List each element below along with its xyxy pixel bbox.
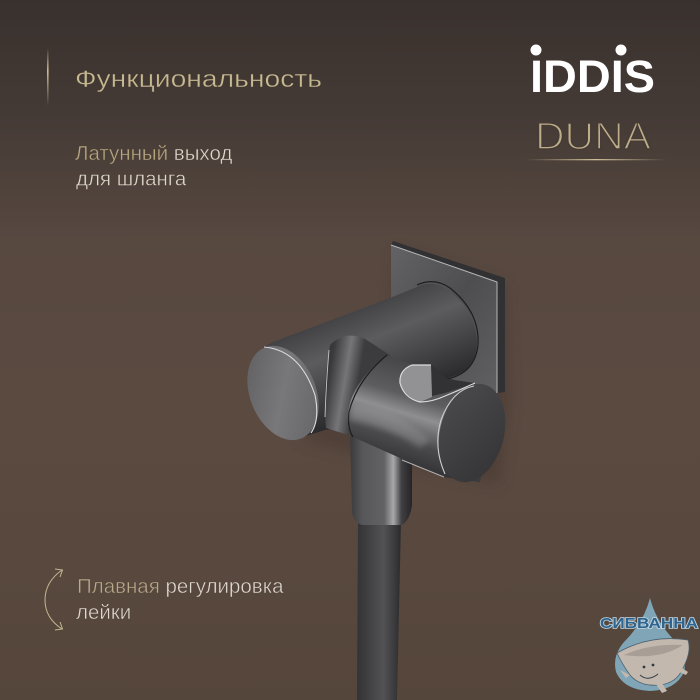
- accent line: heading: [47, 48, 49, 106]
- neck collar: [350, 430, 412, 525]
- shadow on wall: [300, 250, 510, 485]
- brand logo: IDDIS: IDDIS: [530, 51, 655, 102]
- wall plate: [391, 241, 505, 393]
- left disk cap: [234, 335, 332, 451]
- wall junction dark rim: [417, 282, 478, 379]
- text block: smooth adjustment: Плавная регулировка: [77, 575, 284, 598]
- heading: Функциональность: [75, 66, 322, 93]
- swivel band: [325, 336, 390, 435]
- holder slot: [400, 365, 432, 402]
- text block: brass outlet: для шланга: [76, 168, 187, 190]
- series name: DUNA: DUNA: [535, 116, 652, 158]
- accent line: series: [526, 159, 666, 160]
- watermark logo: Сибванна: [600, 598, 698, 693]
- holder body: [348, 355, 500, 482]
- right disk cap: [429, 377, 515, 489]
- product: shower outlet with holder and hose: [234, 241, 515, 700]
- drop: [615, 598, 685, 691]
- tub face: [640, 664, 658, 678]
- tub feet: [620, 668, 688, 693]
- text block: brass outlet: Латунный выход: [75, 142, 232, 165]
- tub: [617, 639, 689, 685]
- main cylinder: [263, 284, 477, 440]
- icon: rotation arrow: [45, 569, 62, 630]
- dark recess behind slot: [431, 365, 475, 396]
- holder brushed highlight: [350, 405, 430, 448]
- text block: smooth adjustment: лейки: [76, 601, 131, 624]
- brand name: СИБВАННА: [600, 615, 698, 632]
- hose: [357, 520, 401, 700]
- slot edge highlight: [400, 365, 475, 402]
- holder underside highlight: [402, 460, 444, 477]
